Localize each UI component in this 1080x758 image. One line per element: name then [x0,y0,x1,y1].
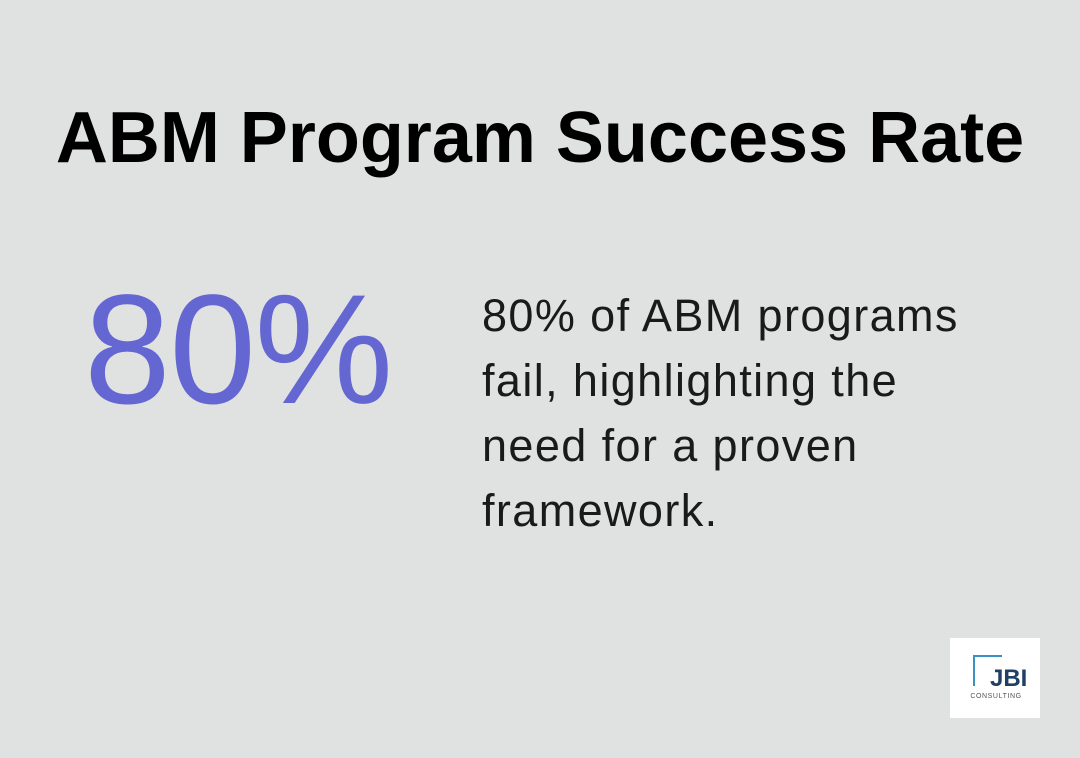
big stat: 80% [84,263,392,437]
description text: 80% of ABM programs [482,290,959,341]
description text [482,290,959,536]
description text: fail, highlighting the [482,355,898,406]
logo [950,638,1040,718]
logo: JBI [990,665,1027,692]
description text: need for a proven [482,420,859,471]
logo: CONSULTING [970,693,1022,700]
description text: framework. [482,485,719,536]
title: ABM Program Success Rate [56,98,1024,178]
